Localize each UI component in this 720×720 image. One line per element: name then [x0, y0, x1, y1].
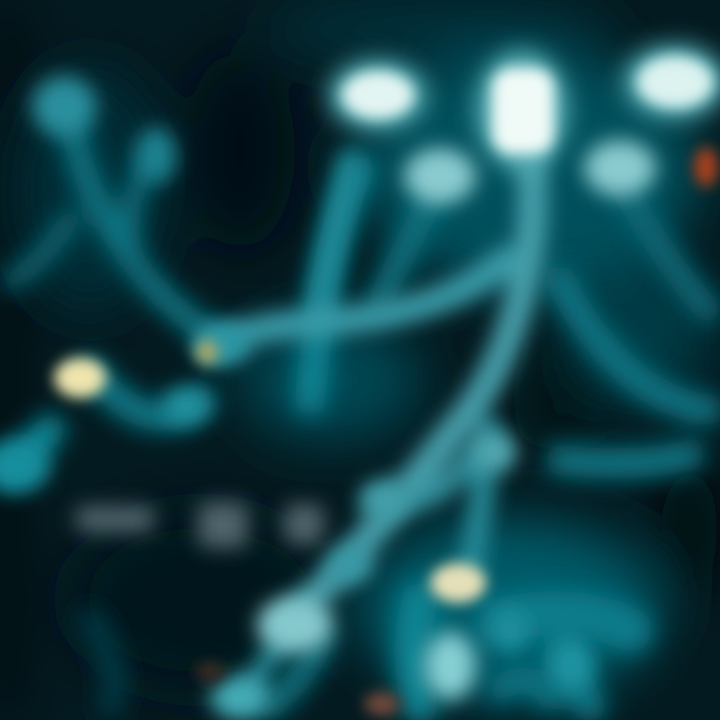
- nodes: white: [342, 56, 713, 154]
- red accents: [196, 147, 718, 716]
- network branches: bright: [215, 150, 532, 695]
- nodes: yellow: [54, 340, 486, 603]
- smudged grey labels: [76, 502, 324, 548]
- network branches: dim: [12, 120, 708, 706]
- nodes: white halos: [328, 44, 720, 170]
